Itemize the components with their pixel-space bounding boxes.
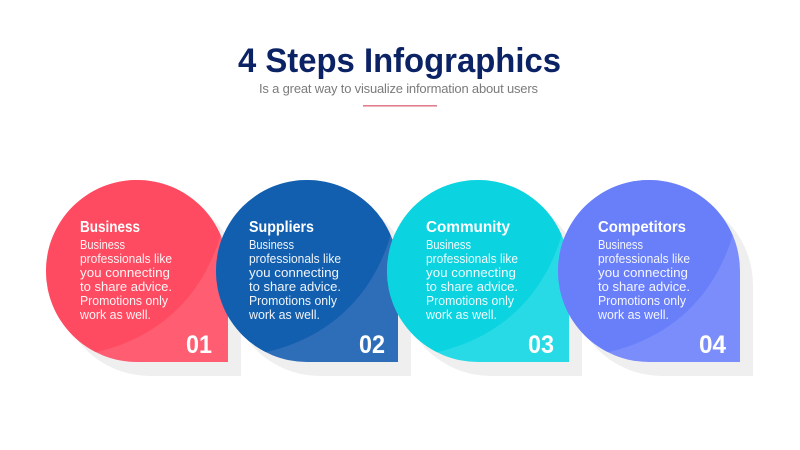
body text: step 1: Promotions only: [80, 294, 169, 308]
teardrop: step 1: [46, 180, 228, 362]
body text: step 2: Business: [249, 238, 294, 252]
number: 01: 01: [186, 331, 212, 359]
body text: step 4: professionals like: [598, 252, 690, 266]
body text: step 1: you connecting: [80, 266, 170, 280]
shadow: step 1: [59, 194, 241, 376]
body text: step 3: Business: [426, 238, 471, 252]
inner shade: step 2: [216, 180, 391, 352]
body text: step 2: you connecting: [249, 266, 339, 280]
number: 03: 03: [528, 331, 554, 359]
number: 02: 02: [359, 331, 385, 359]
panel: step 4 Competitors: [558, 180, 753, 376]
body text: step 3: to share advice.: [426, 280, 518, 294]
body text: step 1: work as well.: [79, 308, 151, 322]
body text: step 3: [425, 238, 518, 322]
teardrop: step 4: [558, 180, 740, 362]
body text: step 4: Business: [598, 238, 643, 252]
inner shade: step 1: [46, 180, 220, 352]
body text: step 2: [248, 238, 341, 322]
shadow: step 2: [229, 194, 411, 376]
body text: step 3: professionals like: [426, 252, 518, 266]
heading: Community: Community: [426, 219, 510, 236]
panel: step 2 Suppliers: [216, 180, 411, 376]
shadow: step 3: [400, 194, 582, 376]
heading: Suppliers: Suppliers: [249, 219, 314, 236]
title underline: [363, 105, 437, 107]
heading: Business: Business: [80, 219, 140, 236]
body text: step 2: work as well.: [248, 308, 320, 322]
body text: step 4: [597, 238, 690, 322]
body text: step 4: work as well.: [597, 308, 669, 322]
subtitle: Is a great way to visualize information about users: [259, 81, 538, 96]
body text: step 1: Business: [80, 238, 125, 252]
body text: step 1: [79, 238, 172, 322]
body text: step 4: to share advice.: [598, 280, 690, 294]
body text: step 4: Promotions only: [598, 294, 687, 308]
heading: Competitors: Competitors: [598, 219, 686, 236]
inner shade: step 4: [558, 180, 732, 352]
body text: step 4: you connecting: [598, 266, 688, 280]
panel: step 3 Community: [387, 180, 582, 376]
shadow: step 4: [571, 194, 753, 376]
body text: step 3: you connecting: [426, 266, 516, 280]
inner shade: step 3: [387, 180, 562, 352]
body text: step 2: Promotions only: [249, 294, 338, 308]
body text: step 2: to share advice.: [249, 280, 341, 294]
body text: step 3: Promotions only: [426, 294, 515, 308]
number: 04: 04: [699, 331, 726, 359]
body text: step 1: professionals like: [80, 252, 172, 266]
body text: step 1: to share advice.: [80, 280, 172, 294]
title: 4 Steps Infographics: [238, 42, 561, 80]
panel: step 1 Business: [46, 180, 241, 376]
body text: step 3: work as well.: [425, 308, 497, 322]
teardrop: step 3: [387, 180, 569, 362]
teardrop: step 2: [216, 180, 398, 362]
body text: step 2: professionals like: [249, 252, 341, 266]
